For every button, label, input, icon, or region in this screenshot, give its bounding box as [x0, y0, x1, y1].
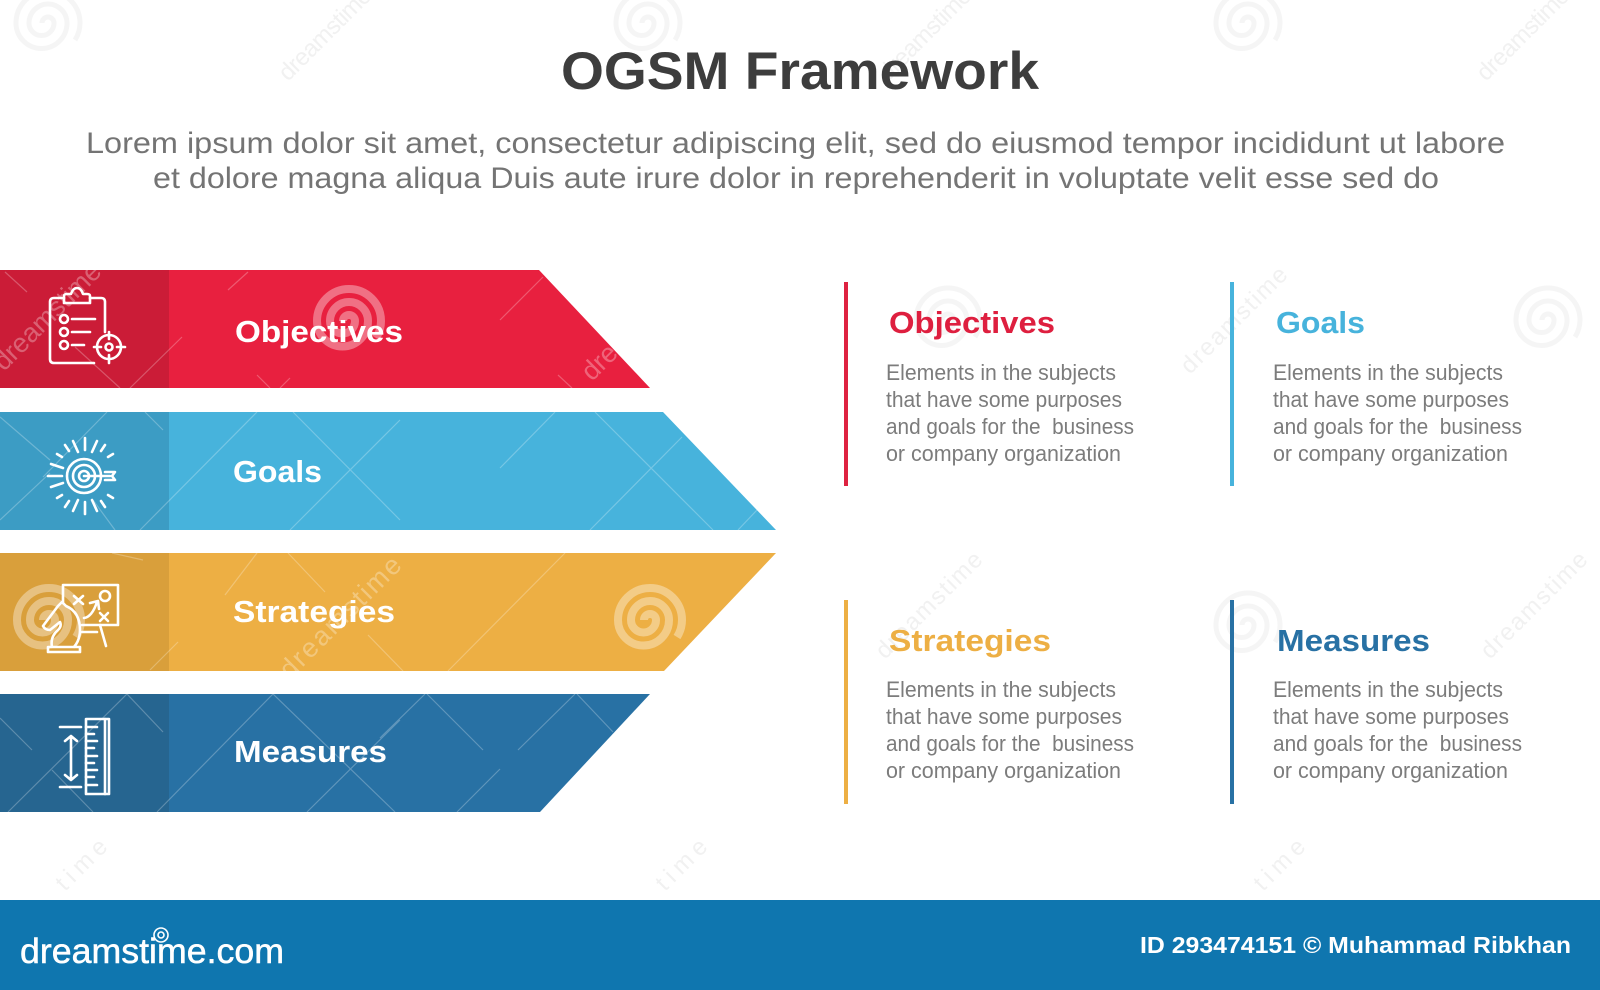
footer band	[0, 900, 1600, 990]
icon: clipboard with target	[50, 288, 125, 363]
body text: that have some purposes	[886, 704, 1122, 729]
footer credit: ID 293474151 © Muhammad Ribkhan	[1140, 932, 1571, 958]
body text: Elements in the subjects	[886, 677, 1116, 702]
icon: chess knight and board	[43, 585, 118, 652]
panel: objectives arrow bar	[0, 270, 650, 388]
body text: and goals for the business	[1273, 414, 1522, 439]
panel: goals arrow bar	[0, 412, 776, 530]
subtitle text block: et dolore magna aliqua Duis aute irure dolor in reprehenderit in voluptate velit esse sed do	[153, 162, 1439, 195]
body text: and goals for the business	[1273, 731, 1522, 756]
white-area watermark: dreamstime	[1175, 261, 1293, 379]
body text: Elements in the subjects	[1273, 677, 1503, 702]
body text	[886, 677, 1134, 783]
label: objectives: Objectives	[235, 314, 403, 349]
body text: and goals for the business	[886, 414, 1134, 439]
white-area watermark: dreamstime	[870, 546, 988, 664]
body text	[1273, 360, 1522, 466]
panel: measures description	[1230, 600, 1522, 804]
label: measures: Measures	[234, 734, 387, 769]
watermark overlay	[0, 256, 757, 812]
subtitle text block	[86, 127, 1505, 195]
white-area watermark: dreamstime	[1475, 546, 1593, 664]
body text: or company organization	[886, 441, 1121, 466]
watermark overlay: dreamstime	[273, 550, 407, 684]
body text: and goals for the business	[886, 731, 1134, 756]
body text: Elements in the subjects	[1273, 360, 1503, 385]
body text: that have some purposes	[1273, 704, 1509, 729]
body text: Elements in the subjects	[886, 360, 1116, 385]
body text: or company organization	[1273, 758, 1508, 783]
label: strategies: Strategies	[233, 594, 395, 629]
footer logo: dreamstime.com: dreamstime.com	[20, 932, 284, 971]
panel: strategies description	[844, 600, 1134, 804]
heading: goals: Goals	[1276, 305, 1365, 340]
body text: that have some purposes	[1273, 387, 1509, 412]
panel: objectives description	[844, 282, 1134, 486]
watermark overlay: dreamstime	[575, 266, 695, 386]
white-area watermark: time	[650, 833, 713, 896]
title: OGSM Framework	[561, 42, 1040, 101]
heading: objectives: Objectives	[889, 305, 1055, 340]
icon: ruler with height arrows	[60, 719, 109, 794]
body text: or company organization	[1273, 441, 1508, 466]
subtitle text block: Lorem ipsum dolor sit amet, consectetur adipiscing elit, sed do eiusmod tempor incididunt ut labore	[86, 127, 1505, 160]
body text: or company organization	[886, 758, 1121, 783]
icon: target with rays	[48, 438, 115, 514]
label: goals: Goals	[233, 454, 322, 489]
heading: measures: Measures	[1277, 623, 1430, 658]
body text	[1273, 677, 1522, 783]
white-area watermark: time	[1248, 833, 1311, 896]
panel: goals description	[1230, 282, 1522, 486]
body text: that have some purposes	[886, 387, 1122, 412]
heading: strategies: Strategies	[889, 623, 1051, 658]
panel: measures arrow bar	[0, 694, 650, 812]
body text	[886, 360, 1134, 466]
panel: strategies arrow bar	[0, 553, 776, 671]
white-area watermark: time	[50, 833, 113, 896]
